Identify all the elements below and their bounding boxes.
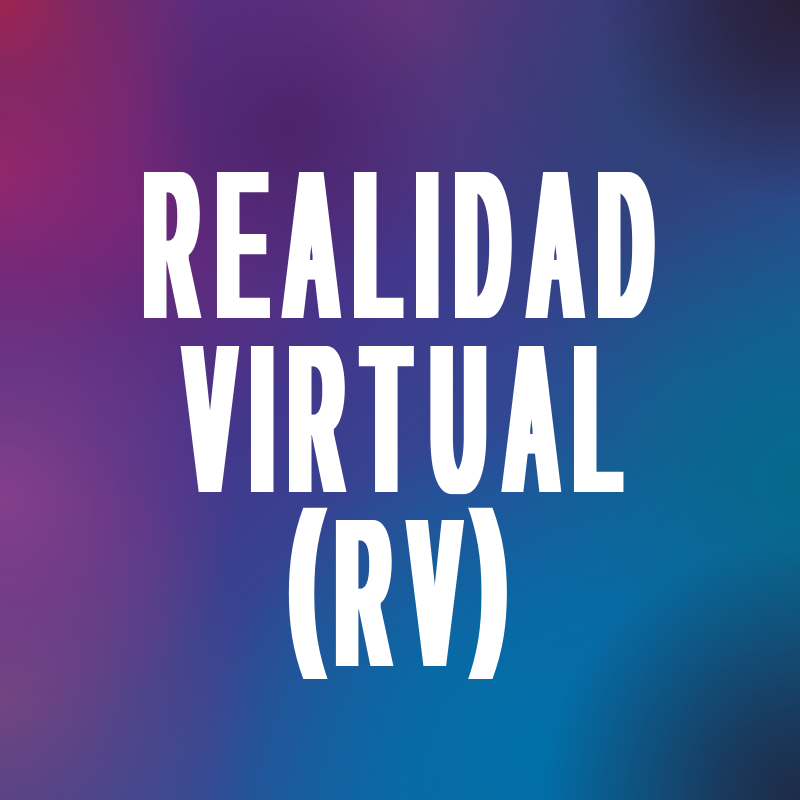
title line: (RV): RV (337, 472, 459, 715)
title line: (RV): ) (473, 472, 506, 682)
title line: (RV) (290, 472, 506, 715)
title line: REALIDAD: REALIDAD (145, 124, 652, 367)
title line: (RV): ( (290, 472, 323, 682)
title line: VIRTUAL: VIRTUAL (186, 298, 620, 541)
